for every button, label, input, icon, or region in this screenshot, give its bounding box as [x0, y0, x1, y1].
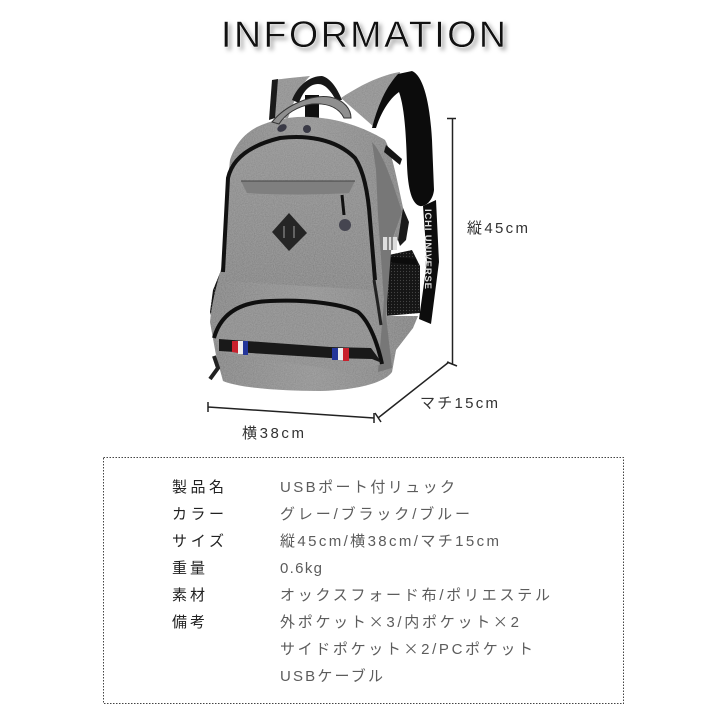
- row: size: サイズ: [172, 533, 224, 550]
- label: depth: マチ15cm: [420, 395, 498, 412]
- backpack illustration: [210, 71, 439, 391]
- right shoulder strap: [341, 71, 439, 324]
- zipper pulls top: [276, 122, 311, 134]
- side mesh pocket left: [210, 268, 222, 322]
- row: weight: 0.6kg: [280, 560, 322, 577]
- label: width: 横38cm: [242, 425, 304, 442]
- row: color: カラー: [172, 506, 224, 523]
- right shoulder strap: ICHI UNIVERSE: [422, 209, 433, 289]
- side mesh pocket right: [384, 250, 420, 316]
- spec panel: [104, 458, 624, 704]
- dotted frame: [104, 458, 624, 704]
- dimension: height line: [447, 118, 457, 366]
- small pocket flap: [241, 181, 355, 231]
- black ribbon with tricolor: [219, 339, 382, 363]
- zipper left bottom: [210, 356, 218, 379]
- lower front pocket: [214, 301, 382, 372]
- row: size: 縦45cm/横38cm/マチ15cm: [280, 533, 499, 550]
- row: weight: 重量: [172, 560, 205, 577]
- webbing strap: [419, 200, 439, 324]
- row: color: グレー/ブラック/ブルー: [280, 505, 470, 523]
- left shoulder strap and top webbing: [269, 76, 342, 120]
- USB port: [384, 145, 402, 165]
- body side panel shade: [372, 142, 402, 372]
- zipper right side: [374, 280, 381, 325]
- top handle: [272, 97, 351, 124]
- row: notes: [172, 611, 533, 685]
- row: notes: サイドポケット×2/PCポケット: [280, 638, 533, 659]
- dimension: depth line: [375, 362, 449, 422]
- row: notes: USBケーブル: [280, 667, 383, 685]
- label: height: 縦45cm: [467, 220, 528, 237]
- row: notes: 備考: [172, 614, 205, 631]
- diamond logo patch: [272, 213, 307, 251]
- row: product name: 製品名: [172, 479, 224, 496]
- title: INFORMATION: [221, 13, 506, 55]
- row: product name: [172, 479, 455, 496]
- row: material: オックスフォード布/ポリエステル: [280, 587, 550, 604]
- row: material: 素材: [172, 587, 205, 604]
- row: product name: USBポート付リュック: [280, 479, 455, 496]
- row: size: [172, 533, 499, 550]
- row: notes: 外ポケット×3/内ポケット×2: [280, 611, 519, 632]
- dimension: width line: [208, 402, 374, 423]
- row: color: [172, 505, 470, 523]
- row: weight: [172, 560, 322, 577]
- front panel upper: [223, 137, 376, 290]
- buckle and reflective strip: [383, 208, 409, 250]
- main body: [210, 117, 418, 391]
